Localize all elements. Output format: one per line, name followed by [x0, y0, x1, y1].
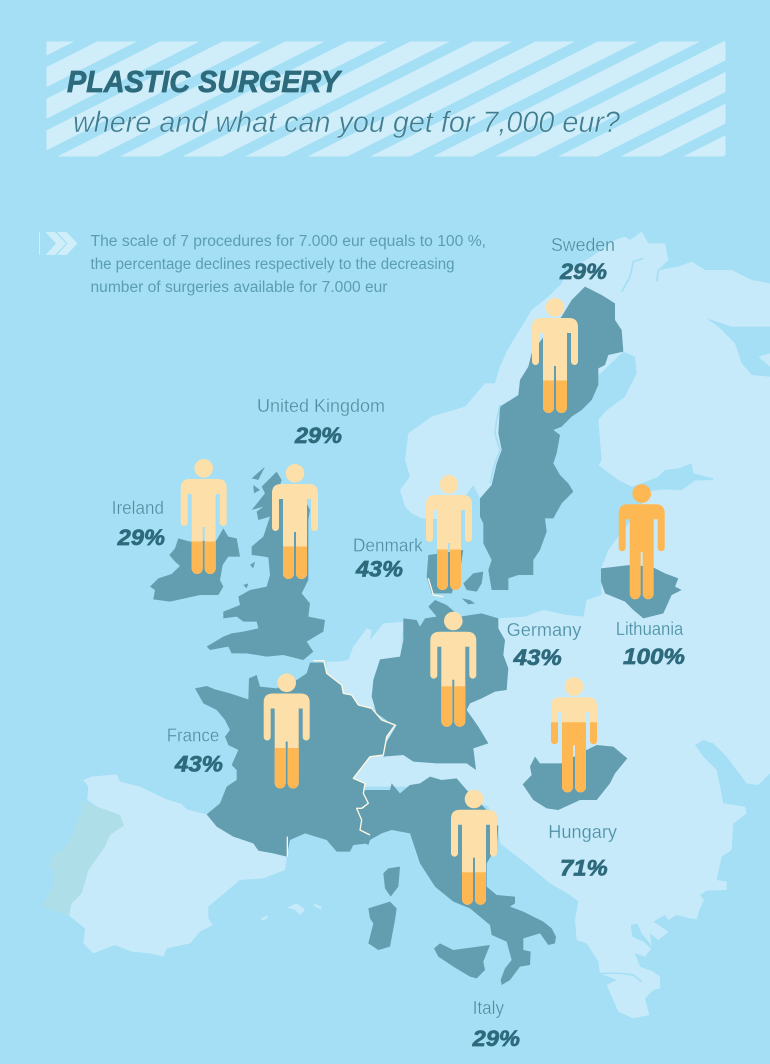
title: PLASTIC SURGERY [67, 64, 343, 99]
label: France: France [167, 726, 219, 746]
icon: chevrons [39, 232, 78, 255]
figure: Germany 43% [430, 612, 476, 727]
map: highlighted borders [287, 578, 443, 857]
figure: Italy 29% [451, 790, 497, 905]
map: Sweden [480, 287, 623, 590]
banner stripes [46, 42, 726, 156]
label: Denmark: Denmark [353, 536, 424, 556]
label: United Kingdom: United Kingdom [257, 396, 385, 416]
map: Belgium and Netherlands [327, 622, 405, 708]
label: United Kingdom [257, 396, 385, 448]
label: Italy: 29% [472, 1026, 520, 1051]
label: Lithuania: Lithuania [616, 619, 684, 639]
map: Lithuania [601, 565, 682, 618]
map: United Kingdom [207, 467, 325, 660]
label: Sweden: Sweden [551, 235, 615, 255]
label: Ireland: Ireland [112, 498, 164, 518]
map: non-highlighted central and eastern land [353, 477, 770, 1018]
explanatory text: number of surgeries available for 7.000 eur [90, 279, 388, 296]
map: non-highlighted northern land (Norway, Finland, Russia) [400, 232, 770, 520]
label: France: 43% [174, 752, 223, 777]
label: Hungary: Hungary [548, 822, 617, 842]
explanatory text [90, 233, 486, 296]
label: Denmark [353, 536, 424, 582]
map of Europe [42, 232, 770, 1018]
subtitle: where and what can you get for 7,000 eur? [73, 106, 620, 139]
header banner [46, 42, 726, 156]
label: Sweden: 29% [559, 259, 607, 284]
label: Italy [472, 998, 520, 1051]
map: France [195, 663, 395, 857]
label: Hungary [548, 822, 617, 881]
figure: Lithuania 100% [619, 484, 665, 599]
label: Hungary: 71% [560, 856, 608, 881]
map: Spain [42, 774, 322, 957]
label: Italy: Italy [473, 998, 504, 1018]
label: Lithuania: 100% [623, 644, 685, 669]
map: Hungary [523, 745, 627, 810]
explanatory text: The scale of 7 procedures for 7.000 eur equals to 100 %, [90, 233, 486, 250]
explanatory text: the percentage declines respectively to the decreasing [90, 256, 454, 273]
map: Italy with Sicily, Corsica, Sardinia [357, 777, 556, 985]
label: Denmark: 43% [355, 557, 403, 582]
figure: United Kingdom 29% [272, 464, 318, 579]
figure: Denmark 43% [426, 475, 472, 590]
label: Germany: 43% [513, 645, 562, 670]
map: Portugal [42, 802, 124, 916]
map: Ireland [150, 528, 240, 602]
label: United Kingdom: 29% [294, 423, 342, 448]
map: Germany and Denmark [372, 550, 508, 770]
label: Sweden [551, 235, 615, 284]
label: Lithuania [616, 619, 685, 669]
label: Ireland [112, 498, 165, 550]
figure: Ireland 29% [181, 459, 227, 574]
label: France [167, 726, 223, 777]
figure: Hungary 71% [551, 677, 597, 792]
label: Germany: Germany [507, 620, 581, 640]
map: Balearic islands [261, 903, 322, 921]
label: Ireland: 29% [117, 525, 165, 550]
figure: Sweden 29% [532, 298, 578, 413]
label: Germany [507, 620, 581, 670]
figure: France 43% [264, 674, 310, 788]
